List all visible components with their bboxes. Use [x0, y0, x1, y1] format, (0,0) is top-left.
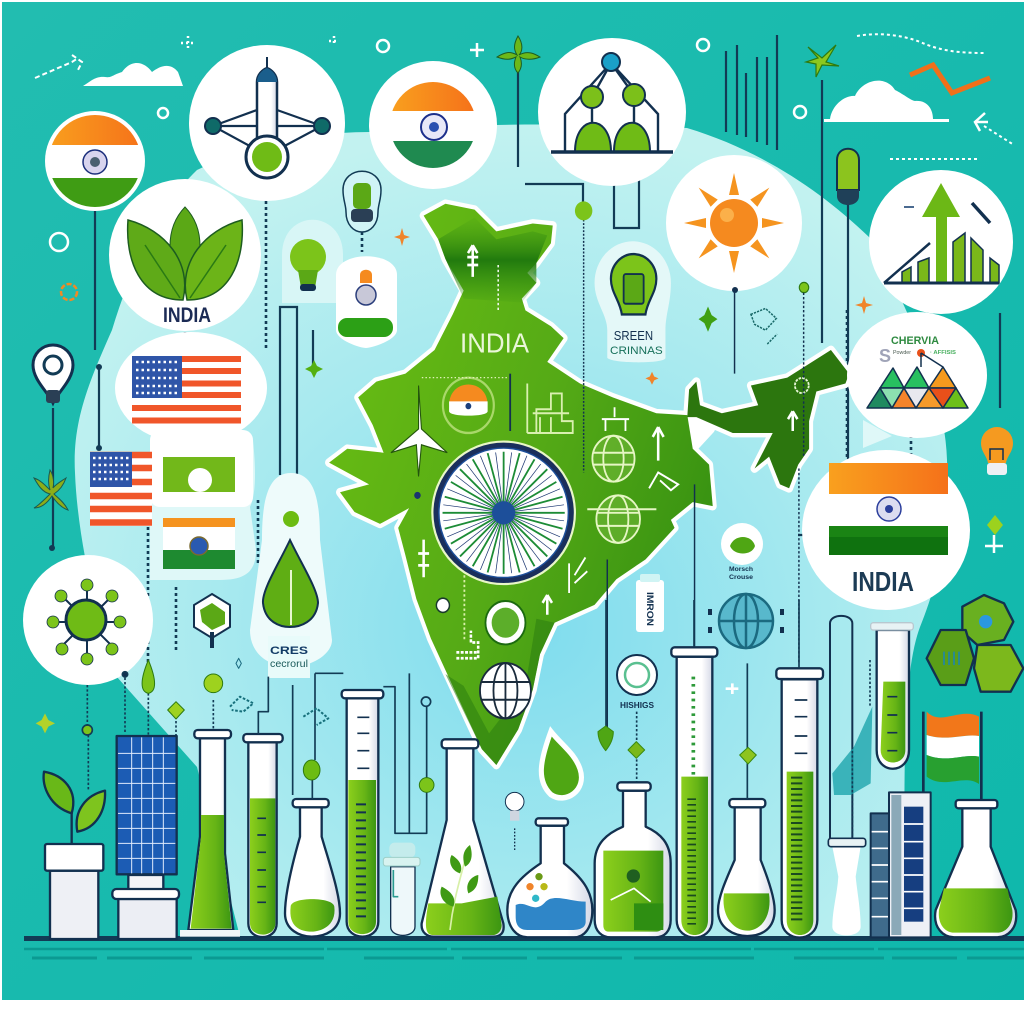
panel: bulb card	[282, 220, 343, 303]
plane leaf icon	[806, 45, 839, 77]
markers	[598, 726, 756, 764]
solar building	[871, 792, 931, 937]
green water drop	[541, 731, 581, 798]
shelf ground lines	[24, 936, 1024, 958]
orange trend line	[910, 65, 990, 93]
green drops and markers	[142, 660, 434, 792]
green caption icon: Crouse	[729, 574, 753, 581]
small test tube	[871, 623, 913, 769]
plane icon	[391, 386, 447, 476]
leaf glyph cluster	[751, 308, 777, 344]
hexagon cluster	[927, 595, 1023, 692]
white plus	[726, 683, 738, 694]
panel: speech bubble triangles: CHERVIA	[891, 335, 939, 347]
panel: flag card	[336, 256, 397, 348]
badge with Hishigs label	[617, 655, 657, 710]
circle: sun	[666, 155, 802, 293]
flask two	[718, 799, 775, 936]
right side bulb	[981, 427, 1013, 475]
map: main landmass	[329, 204, 713, 765]
connector pipes	[82, 672, 431, 833]
molecule doodle	[230, 697, 328, 725]
map: northeast region	[687, 350, 849, 488]
tall measuring tube	[671, 647, 717, 937]
small rings and dots	[50, 36, 806, 251]
bottom left instruments	[36, 658, 504, 939]
map pin icon	[33, 345, 73, 403]
orange stars	[394, 228, 873, 314]
building outline	[527, 384, 573, 433]
northeast gear	[795, 378, 809, 393]
connector end dots	[49, 174, 914, 551]
small stack icon	[456, 631, 478, 658]
dashed arrow top left	[35, 55, 82, 78]
panel: small flags	[90, 452, 235, 569]
round flask with water	[507, 818, 592, 937]
circle: India flag with label	[802, 450, 970, 610]
shadow shape	[832, 707, 872, 795]
world globe	[480, 663, 531, 718]
tall measuring tube two	[776, 668, 823, 937]
capsule bulb top	[343, 171, 381, 232]
map: white outline	[329, 204, 849, 765]
yellow star	[36, 713, 55, 733]
orange gear outline	[61, 284, 77, 300]
map: dark shading north	[438, 218, 547, 303]
Ashoka chakra emblem	[432, 442, 575, 584]
dark data stem	[582, 220, 586, 472]
connectors	[606, 600, 870, 838]
small plant icon	[34, 470, 68, 510]
stems east	[607, 293, 735, 733]
map label INDIA: INDIA	[460, 328, 529, 359]
small bulb	[505, 792, 524, 850]
badge with Hishigs label: HISHIGS	[620, 701, 655, 710]
flask one	[285, 799, 340, 937]
right flask	[935, 800, 1016, 937]
measuring tube two	[342, 690, 383, 937]
top small capsule right	[837, 149, 859, 205]
top right dotted lines	[857, 34, 1014, 159]
panel: speech bubble triangles: S	[879, 346, 891, 366]
bottle label	[636, 574, 664, 632]
circle: India flag with label: INDIA	[852, 566, 914, 597]
panel: green drop flask with label: CRES	[270, 645, 308, 657]
connector lines	[53, 35, 1000, 663]
India map group	[329, 201, 849, 798]
light blue backdrop blob	[75, 125, 947, 937]
circle: leaves with INDIA label: INDIA	[163, 304, 211, 327]
circle: India flag left	[45, 110, 145, 211]
top left cloud	[83, 63, 183, 86]
circle: thermometer rocket	[189, 45, 345, 201]
panel: speech bubble triangles	[847, 312, 987, 448]
green caption icon	[721, 523, 763, 581]
green star	[305, 360, 323, 378]
lab icons east	[569, 407, 678, 593]
conical flask with plant	[422, 739, 504, 937]
bulb card Sreen label	[595, 241, 671, 362]
panel: green drop flask with label	[250, 473, 332, 678]
globe icons on the map	[587, 436, 656, 543]
potted plant	[44, 772, 105, 939]
circle: India flag top	[369, 61, 497, 189]
orange star small	[645, 372, 659, 385]
panel: green drop flask with label: cecrorul	[270, 659, 308, 670]
bulb card Sreen label: SREEN	[614, 329, 653, 343]
circle: flask network	[538, 38, 686, 186]
circle: growth chart	[869, 0, 1013, 314]
hex icon	[194, 594, 230, 648]
bottom right instruments	[505, 595, 1023, 937]
white plus right	[985, 535, 1003, 553]
green globe	[485, 601, 525, 644]
bulb card Sreen label: CRINNAS	[610, 346, 663, 357]
white footer	[0, 1000, 1024, 1024]
round flag badge	[443, 378, 494, 433]
green caption icon: Morsch	[729, 566, 753, 573]
top right cloud	[824, 81, 949, 122]
green star right	[987, 515, 1003, 535]
top leaf icon	[497, 36, 540, 73]
panel: US flag bubble	[115, 332, 267, 580]
green star	[699, 306, 717, 332]
blue sparkle	[236, 658, 241, 668]
bottle label: IMRON	[645, 592, 655, 626]
slim tube and bottle	[828, 616, 866, 935]
map: dark shading south	[445, 619, 555, 765]
cone tube	[180, 730, 240, 937]
circle: leaves with INDIA label	[109, 179, 261, 331]
small arrow mark	[975, 113, 988, 131]
solar panel	[112, 736, 179, 939]
arrows on the map	[418, 245, 797, 615]
measuring tube one	[243, 734, 283, 937]
circle: molecule	[23, 555, 153, 685]
blue network globe	[708, 594, 784, 648]
small vial	[383, 843, 420, 935]
panel: speech bubble triangles: Powder	[893, 350, 911, 356]
waving flag	[923, 712, 981, 800]
panel: speech bubble triangles: · AFFISIS	[930, 350, 956, 356]
bulb flask	[595, 782, 671, 937]
